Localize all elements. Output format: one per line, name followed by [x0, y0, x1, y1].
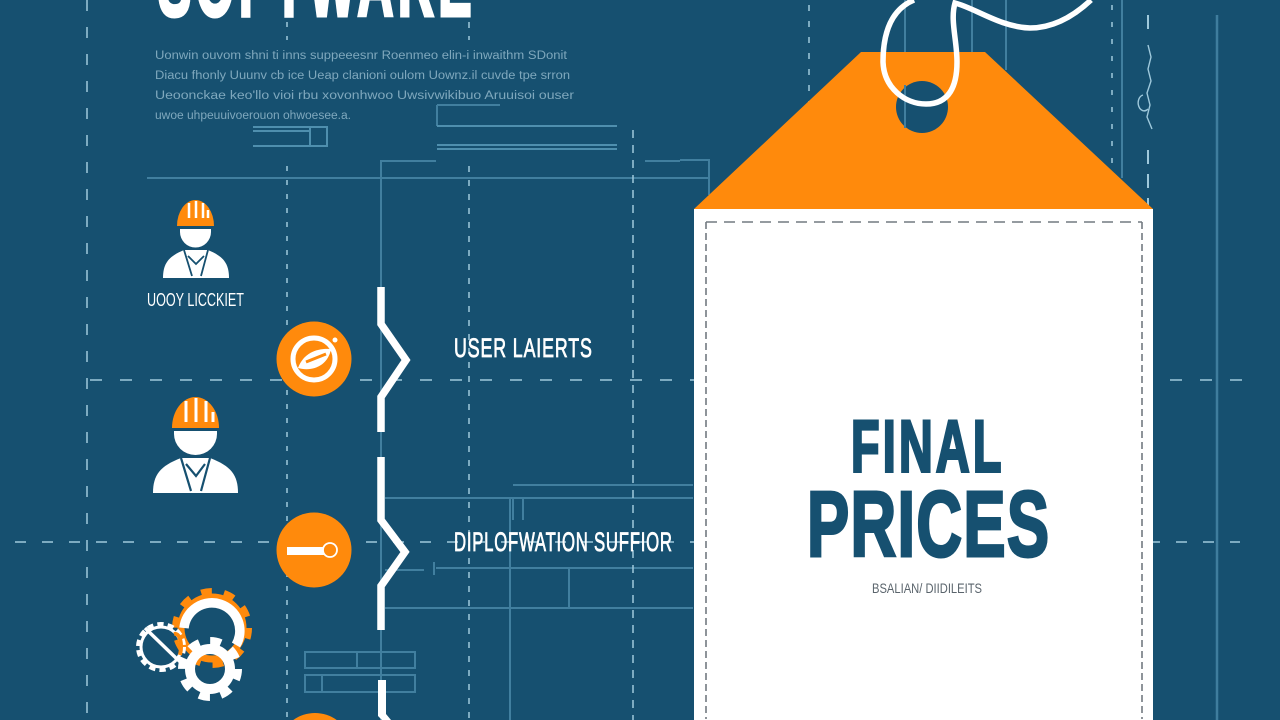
- icon: gears: [139, 594, 246, 696]
- tag string: [883, 0, 1091, 104]
- text block: intro paragraph: uwoe uhpeuuivoerouon ohwoesee.a.: [155, 110, 351, 122]
- tag top: [694, 52, 1153, 209]
- label: worker caption: UOOY LICCKIET: [147, 290, 244, 310]
- connector: chevron two: [381, 457, 405, 630]
- connector: chevron one: [381, 287, 406, 432]
- text block: intro paragraph: Ueoonckae keo'llo vioi rbu xovonhwoo Uwsivwikibuo Aruuisoi ouser: [155, 90, 574, 102]
- panel: price tag: [694, 0, 1153, 720]
- heading: final: FINAL: [851, 406, 1001, 487]
- icon: worker two: [153, 397, 238, 493]
- icon: worker one: [163, 200, 229, 278]
- heading: prices: PRICES: [807, 472, 1049, 576]
- icon: orange circle one: [276, 322, 352, 396]
- text block: intro paragraph: [155, 50, 574, 122]
- connector: chevron three: [378, 680, 391, 720]
- caption: BSALIAN/ DIIDILEITS: [872, 580, 982, 596]
- label: user step: USER LAIERTS: [454, 332, 592, 363]
- icon: orange circle three: [293, 713, 337, 720]
- tag body: [694, 209, 1153, 720]
- label: deployment step: DIPLOFWATION SUFFIOR: [454, 527, 672, 557]
- text block: intro paragraph: Uonwin ouvom shni ti inns suppeeesnr Roenmeo elin-i inwaithm SDonit: [155, 50, 568, 62]
- text block: intro paragraph: Diacu fhonly Uuunv cb ice Ueap clanioni oulom Uownz.il cuvde tpe srron: [155, 70, 570, 82]
- tag stitching: [706, 222, 1142, 719]
- icon: orange circle two: [276, 512, 352, 588]
- tag hole: [896, 81, 948, 133]
